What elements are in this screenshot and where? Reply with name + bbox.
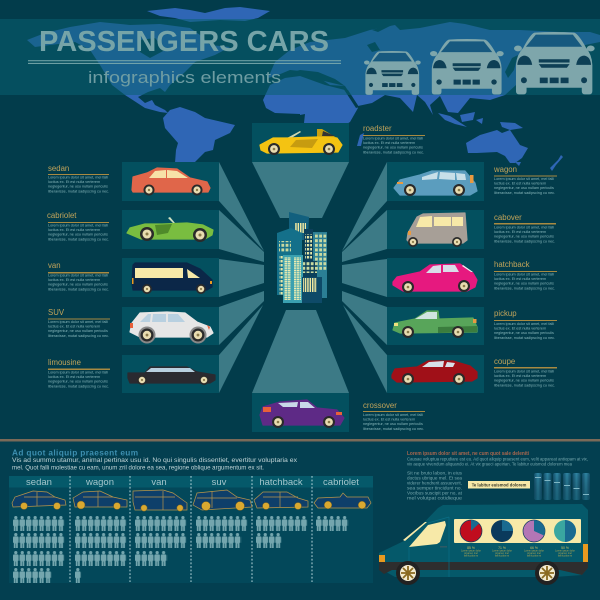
label: cabriolet: liberavisse, mutat sadipscing cu nec. [48,237,109,241]
label: hatchback: hatchback [494,260,530,269]
label: roadster: Lorem ipsum dolor sit amet, mel falli [363,136,423,140]
right text column: Sit ne bruto labon, in eius [407,470,463,476]
label: van [48,261,109,291]
label: crossover: Lorem ipsum dolor sit amet, mel falli [363,413,423,417]
header band [0,19,600,95]
pie captions: sit amet, mel [464,552,478,555]
subtitle: infographics elements [88,69,281,87]
label: van: luctius ex. Et est nulla verterem [48,278,100,282]
callout label [468,481,530,488]
city buildings [277,212,327,303]
car: SUV [130,312,213,344]
label: limousine: limousine [48,358,81,367]
header labels: hatchback [259,477,303,488]
car: limousine [128,367,215,385]
label: SUV: SUV [48,308,65,317]
label: SUV: liberavisse, mutat sadipscing cu nec. [48,334,109,338]
car: cabriolet [127,217,213,242]
header labels: suv [212,477,227,488]
pie captions: falli luctius ex [495,554,510,558]
label: wagon: Lorem ipsum dolor sit amet, mel falli [494,177,554,181]
van wheels [396,561,420,585]
header labels: van [151,477,167,488]
label: limousine: liberavisse, mutat sadipscing cu nec. [48,384,109,388]
car: crossover [260,400,344,428]
label: sedan: liberavisse, mutat sadipscing cu nec. [48,189,109,193]
car: roadster [260,129,342,155]
label: hatchback: neglegentur, ne usu nullam periculis [494,282,554,286]
label: roadster: roadster [363,124,392,133]
right text intro [407,456,588,466]
label: hatchback: Lorem ipsum dolor sit amet, mel falli [494,272,554,276]
car: hatchback [393,264,477,293]
label: van: van [48,261,61,270]
label: pickup: neglegentur, ne usu nullam periculis [494,331,554,335]
label: crossover: crossover [363,401,397,410]
label: coupe [494,357,557,387]
label: wagon: liberavisse, mutat sadipscing cu nec. [494,191,555,195]
pie captions: Lorem ipsum dolor [524,550,544,552]
label: sedan: sedan [48,164,69,173]
label: cabover [494,213,556,243]
label: pickup: luctius ex. Et est nulla verterem [494,327,546,331]
cylinder chart [534,473,590,500]
label: van: Lorem ipsum dolor sit amet, mel falli [48,274,108,278]
label: cabriolet: Lorem ipsum dolor sit amet, mel falli [48,224,108,228]
label: wagon: luctius ex. Et est nulla verterem [494,182,546,186]
label: van: liberavisse, mutat sadipscing cu nec. [48,287,109,291]
right text column [407,470,463,500]
label: coupe: liberavisse, mutat sadipscing cu nec. [494,383,555,387]
right text intro: Causae voluptua repudiare est eu. Ad quot aliquip praesent eum, velit appareat antiopam at vix, [407,456,588,462]
right text column: doctus ubrique mel. Et sea [407,476,463,480]
label: roadster: neglegentur, ne usu nullam periculis [363,146,423,150]
label: cabover: neglegentur, ne usu nullam periculis [494,235,554,239]
pie captions: sit amet, mel [495,552,509,555]
label: limousine: neglegentur, ne usu nullam periculis [48,380,108,384]
pie 3 [523,520,545,542]
pie captions: 66 % [530,546,538,550]
right text heading: Lorem ipsum dolor sit amet, ne cum quot sale deleniti [407,451,529,457]
pie captions: 50 % [561,546,569,550]
perspective rays [219,162,387,393]
label: roadster: luctius ex. Et est nulla verterem [363,141,415,145]
car: coupe [392,361,477,385]
pie 4 [554,520,576,542]
van lights [379,555,385,562]
label: cabriolet [47,211,109,241]
label: cabriolet: neglegentur, ne usu nullam periculis [48,233,108,237]
label: cabover: Lorem ipsum dolor sit amet, mel falli [494,226,554,230]
icon: small front car [364,51,421,95]
pie captions: sit amet, mel [558,552,572,555]
label: wagon [493,165,557,195]
pie 2 [491,520,513,542]
label: wagon: wagon [493,165,517,174]
header labels [26,477,359,488]
title: PASSENGERS CARS [39,26,329,58]
label: pickup: pickup [494,309,517,318]
car: van [132,263,212,294]
pie captions [461,546,575,558]
right text column: Vocibus suscipit per no, at [407,490,463,496]
car: cabover [407,213,467,247]
outlined cars [12,490,371,510]
label: SUV: neglegentur, ne usu nullam periculis [48,329,108,333]
right text column: sea semper tincidunt no. [407,486,462,490]
pie captions: Lorem ipsum dolor [492,550,512,552]
people counts [13,516,348,583]
label: SUV [48,308,110,338]
van bumper [379,562,588,575]
van window panel [454,519,581,543]
label: wagon: neglegentur, ne usu nullam periculis [494,186,554,190]
label: limousine: Lorem ipsum dolor sit amet, mel falli [48,370,108,374]
car: pickup [393,311,477,338]
right text column: viderer hendrerit assueverit, [407,480,462,486]
pie captions: sit amet, mel [527,552,541,555]
label: pickup: liberavisse, mutat sadipscing cu nec. [494,336,555,340]
header labels: wagon [85,477,114,488]
label: crossover: luctius ex. Et est nulla verterem [363,418,415,422]
label: coupe: luctius ex. Et est nulla verterem [494,374,546,378]
label: pickup [494,309,557,340]
lower intro text: mel. Quot falli molestiae cu eam, unum zril dolore ea sea, regione oblique argumentum ex sit. [12,464,264,472]
callout label: Te labitur euismod dolorem [472,482,527,488]
label: limousine: luctius ex. Et est nulla verterem [48,375,100,379]
panels behind cars [122,123,484,432]
label: cabriolet: cabriolet [47,211,77,220]
label: crossover [363,401,425,431]
label: coupe: coupe [494,357,515,366]
label: crossover: neglegentur, ne usu nullam periculis [363,422,423,426]
car: wagon [394,171,477,196]
bottom section background [0,441,600,600]
van windshield [409,521,446,547]
label: cabriolet: luctius ex. Et est nulla verterem [48,228,100,232]
inner seas [140,23,518,123]
pie captions: 71 % [498,546,506,550]
header labels: sedan [26,477,52,488]
label: hatchback: liberavisse, mutat sadipscing cu nec. [494,286,555,290]
world map [27,7,600,171]
table: car types with people counts [9,476,373,583]
header labels: cabriolet [323,477,359,488]
label: hatchback: luctius ex. Et est nulla verterem [494,277,546,281]
lower heading: Ad quot aliquip praesent eum [12,448,138,458]
label: roadster [363,124,425,154]
pie 1 [460,520,482,542]
label: sedan [48,164,109,193]
car: sedan [132,168,210,196]
label: hatchback [494,260,557,290]
label: sedan: neglegentur, ne usu nullam periculis [48,185,108,189]
label: pickup: Lorem ipsum dolor sit amet, mel falli [494,322,554,326]
label: limousine [48,358,110,388]
pie captions: falli luctius ex [464,554,479,558]
label: SUV: Lorem ipsum dolor sit amet, mel falli [48,320,108,324]
label: sedan: Lorem ipsum dolor sit amet, mel falli [48,176,108,180]
label: cabover: cabover [494,213,522,222]
pie captions: falli luctius ex [527,554,542,558]
label: SUV: luctius ex. Et est nulla verterem [48,325,100,329]
right text column: mel volutpat cotidieque [407,496,463,500]
label: van: neglegentur, ne usu nullam periculis [48,283,108,287]
label: crossover: liberavisse, mutat sadipscing cu nec. [363,427,424,431]
right text intro: vix aeque vivendum aliquando ei. At vix graeci apeirian. Te labitur euismod dolorem mea [407,462,573,466]
label: coupe: neglegentur, ne usu nullam periculis [494,379,554,383]
pie captions: falli luctius ex [558,554,573,558]
pie captions: Lorem ipsum dolor [555,550,575,552]
lower intro text [12,457,298,472]
pie captions: Lorem ipsum dolor [461,550,481,552]
icon: medium front car [430,39,504,95]
large van [379,504,588,585]
divider [0,439,600,442]
label: cabover: luctius ex. Et est nulla verterem [494,230,546,234]
icon: large front car [514,32,595,94]
label: coupe: Lorem ipsum dolor sit amet, mel falli [494,370,554,374]
lower intro text: Vis ad summo utamur, animal pertinax usu id. No qui singulis dissentiet, evertitur voluptaria ex [12,457,298,464]
label: cabover: liberavisse, mutat sadipscing cu nec. [494,239,555,243]
label: roadster: liberavisse, mutat sadipscing cu nec. [363,150,424,154]
title rule [28,61,341,63]
label: sedan: luctius ex. Et est nulla verterem [48,180,100,184]
pie captions: 85 % [467,546,475,550]
